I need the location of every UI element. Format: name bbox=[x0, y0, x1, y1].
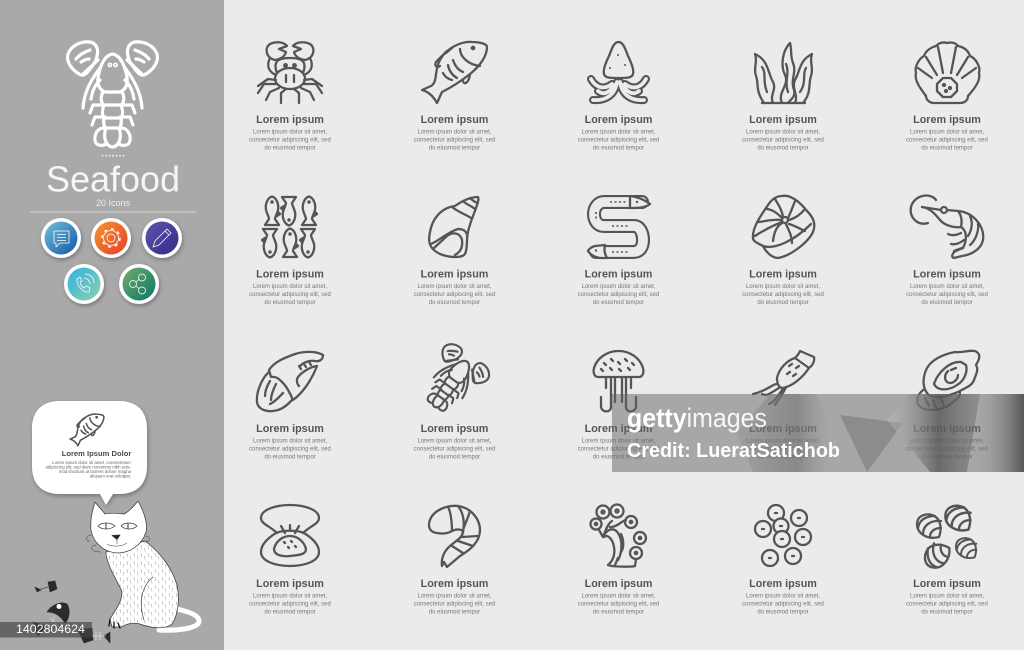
icon cell: caviar bbox=[742, 505, 824, 616]
decorative dots bbox=[102, 155, 124, 157]
icon: shrimp bbox=[429, 506, 480, 567]
body text: Lorem ipsum dolor sit amet, bbox=[417, 594, 492, 600]
icon cell: scallop bbox=[906, 42, 988, 152]
body text: consectetur adipiscing elit, sed bbox=[414, 602, 495, 608]
icon cell: oyster bbox=[906, 351, 988, 461]
icon cell: fish bbox=[414, 42, 495, 152]
body text: consectetur adipiscing elit, sed bbox=[249, 602, 331, 608]
title: Seafood bbox=[46, 158, 180, 200]
icon: pen badge bbox=[142, 218, 182, 258]
body text: do eiusmod tempor bbox=[921, 146, 973, 152]
icon: scallop bbox=[916, 42, 979, 103]
icon: jellyfish bbox=[594, 351, 643, 411]
icon: salmon steak bbox=[753, 196, 814, 258]
body text: consectetur adipiscing elit, sed bbox=[742, 602, 824, 608]
icon: whelk shell bbox=[429, 197, 478, 257]
icon cell: crab bbox=[249, 42, 331, 152]
icon: squid bbox=[591, 42, 646, 100]
body text: Lorem ipsum dolor sit amet, bbox=[417, 439, 492, 445]
icon cell: squid bbox=[578, 42, 659, 152]
heading: Lorem ipsum bbox=[585, 578, 652, 590]
heading: Lorem ipsum bbox=[421, 114, 488, 126]
heading: Lorem ipsum bbox=[421, 268, 488, 280]
icon: calamari bbox=[753, 351, 814, 405]
icon: octopus arm bbox=[590, 504, 646, 567]
body text: consectetur adipiscing elit, sed bbox=[578, 292, 659, 298]
icon: seaweed bbox=[755, 43, 812, 103]
bubble text: mod tincidunt ut laoreet dolore magna bbox=[59, 469, 132, 474]
icon cell: octopus arm bbox=[578, 504, 659, 616]
bubble text: adipiscing elit, sed diam nonummy nibh euis- bbox=[45, 464, 132, 470]
body text: consectetur adipiscing elit, sed bbox=[906, 138, 988, 144]
body text: Lorem ipsum dolor sit amet, bbox=[581, 439, 656, 445]
heading: Lorem ipsum bbox=[585, 423, 652, 435]
icon: message badge bbox=[41, 218, 81, 258]
icon: clam bbox=[261, 505, 319, 566]
heading: Lorem ipsum bbox=[421, 423, 488, 435]
heading: Lorem ipsum bbox=[256, 578, 324, 590]
cat illustration bbox=[86, 501, 199, 630]
watermark logo: gettyimages bbox=[627, 403, 767, 433]
body text: do eiusmod tempor bbox=[921, 300, 973, 306]
heading: Lorem ipsum bbox=[421, 578, 488, 590]
heading: Lorem ipsum bbox=[913, 114, 981, 126]
icon: clams bbox=[917, 506, 976, 570]
body text: Lorem ipsum dolor sit amet, bbox=[910, 284, 984, 290]
icon: fish bbox=[422, 42, 487, 103]
body text: do eiusmod tempor bbox=[429, 455, 480, 461]
subtitle: 20 Icons bbox=[96, 198, 131, 208]
body text: Lorem ipsum dolor sit amet, bbox=[253, 284, 327, 290]
body text: consectetur adipiscing elit, sed bbox=[578, 602, 659, 608]
body text: Lorem ipsum dolor sit amet, bbox=[253, 130, 327, 136]
icon: lobster bbox=[412, 340, 493, 423]
heading: Lorem ipsum bbox=[256, 268, 324, 280]
heading: Lorem ipsum bbox=[913, 423, 981, 435]
icon: caviar bbox=[755, 505, 811, 566]
body text: Lorem ipsum dolor sit amet, bbox=[746, 594, 820, 600]
icon: prawn bbox=[911, 196, 983, 258]
body text: Lorem ipsum dolor sit amet, bbox=[746, 130, 820, 136]
icon cell: jellyfish bbox=[578, 351, 659, 461]
body text: do eiusmod tempor bbox=[921, 455, 973, 461]
image id band: 1402804624 bbox=[16, 622, 85, 636]
panel: left sidebar bbox=[0, 0, 224, 650]
body text: do eiusmod tempor bbox=[429, 300, 480, 306]
body text: Lorem ipsum dolor sit amet, bbox=[253, 594, 327, 600]
heading: Lorem ipsum bbox=[913, 578, 981, 590]
body text: do eiusmod tempor bbox=[593, 455, 644, 461]
heading: Lorem ipsum bbox=[749, 268, 817, 280]
body text: Lorem ipsum dolor sit amet, bbox=[581, 284, 656, 290]
icon: bubble fish bbox=[70, 414, 104, 446]
body text: do eiusmod tempor bbox=[429, 610, 480, 616]
body text: do eiusmod tempor bbox=[264, 146, 316, 152]
body text: do eiusmod tempor bbox=[429, 146, 480, 152]
body text: do eiusmod tempor bbox=[757, 610, 809, 616]
fish bones bbox=[33, 581, 110, 643]
watermark credit: Credit: LueratSatichob bbox=[627, 439, 840, 462]
body text: Lorem ipsum dolor sit amet, bbox=[581, 594, 656, 600]
icon cell: salmon steak bbox=[742, 196, 824, 306]
body text: consectetur adipiscing elit, sed bbox=[906, 292, 988, 298]
body text: do eiusmod tempor bbox=[264, 610, 316, 616]
body text: do eiusmod tempor bbox=[593, 610, 644, 616]
body text: Lorem ipsum dolor sit amet, bbox=[910, 594, 984, 600]
icon: phone badge bbox=[64, 264, 104, 304]
body text: consectetur adipiscing elit, sed bbox=[578, 138, 659, 144]
body text: Lorem ipsum dolor sit amet, bbox=[417, 130, 492, 136]
body text: Lorem ipsum dolor sit amet, bbox=[746, 284, 820, 290]
icon cell: eel bbox=[578, 196, 659, 306]
body text: consectetur adipiscing elit, sed bbox=[414, 138, 495, 144]
body text: do eiusmod tempor bbox=[264, 455, 316, 461]
icon cell: lobster bbox=[412, 340, 495, 461]
body text: Lorem ipsum dolor sit amet, bbox=[746, 439, 820, 445]
body text: consectetur adipiscing elit, sed bbox=[906, 447, 988, 453]
body text: do eiusmod tempor bbox=[921, 610, 973, 616]
body text: consectetur adipiscing elit, sed bbox=[414, 447, 495, 453]
heading: Lorem ipsum bbox=[913, 268, 981, 280]
body text: consectetur adipiscing elit, sed bbox=[742, 292, 824, 298]
heading: Lorem ipsum bbox=[585, 268, 652, 280]
icon cell: shrimp bbox=[414, 506, 495, 616]
heading: Lorem ipsum bbox=[749, 578, 817, 590]
icon cell: clams bbox=[906, 506, 988, 616]
body text: Lorem ipsum dolor sit amet, bbox=[581, 130, 656, 136]
body text: do eiusmod tempor bbox=[593, 146, 644, 152]
body text: do eiusmod tempor bbox=[757, 146, 809, 152]
heading: Lorem ipsum bbox=[256, 114, 324, 126]
icon cell: calamari bbox=[742, 351, 824, 461]
image id band bbox=[0, 622, 92, 638]
body text: consectetur adipiscing elit, sed bbox=[578, 447, 659, 453]
body text: consectetur adipiscing elit, sed bbox=[249, 138, 331, 144]
body text: consectetur adipiscing elit, sed bbox=[414, 292, 495, 298]
icon cell: clam with pearl bbox=[249, 505, 331, 616]
body text: Lorem ipsum dolor sit amet, bbox=[253, 439, 327, 445]
body text: Lorem ipsum dolor sit amet, bbox=[910, 130, 984, 136]
icon: gear badge bbox=[91, 218, 131, 258]
body text: consectetur adipiscing elit, sed bbox=[249, 292, 331, 298]
icon: eel bbox=[588, 196, 650, 258]
body text: do eiusmod tempor bbox=[757, 455, 809, 461]
body text: consectetur adipiscing elit, sed bbox=[249, 447, 331, 453]
icon: crab bbox=[258, 42, 322, 103]
icon cell: crab claw bbox=[249, 352, 331, 461]
icon: oyster bbox=[917, 351, 979, 410]
body text: do eiusmod tempor bbox=[593, 300, 644, 306]
icon cell: small fish bbox=[249, 196, 331, 306]
body text: consectetur adipiscing elit, sed bbox=[742, 138, 824, 144]
bubble heading: Lorem Ipsum Dolor bbox=[62, 449, 131, 458]
heading: Lorem ipsum bbox=[749, 423, 817, 435]
icon: white lobster bbox=[68, 42, 157, 147]
icon cell: prawn bbox=[906, 196, 988, 306]
bubble text: Lorem ipsum dolor sit amet, consectetuer bbox=[52, 460, 132, 465]
icon: small fish bbox=[262, 196, 317, 258]
body text: consectetur adipiscing elit, sed bbox=[906, 602, 988, 608]
body text: Lorem ipsum dolor sit amet, bbox=[910, 439, 984, 445]
body text: do eiusmod tempor bbox=[757, 300, 809, 306]
icon: share badge bbox=[119, 264, 159, 304]
icon cell: whelk bbox=[414, 197, 495, 306]
heading: Lorem ipsum bbox=[585, 114, 652, 126]
body text: do eiusmod tempor bbox=[264, 300, 316, 306]
callout: speech bubble bbox=[32, 401, 147, 505]
body text: consectetur adipiscing elit, sed bbox=[742, 447, 824, 453]
icon: crab claw bbox=[257, 352, 323, 411]
heading: Lorem ipsum bbox=[256, 423, 324, 435]
body text: Lorem ipsum dolor sit amet, bbox=[417, 284, 492, 290]
bubble text: aliquam erat volutpat. bbox=[90, 474, 131, 478]
icon cell: seaweed bbox=[742, 43, 824, 152]
heading: Lorem ipsum bbox=[749, 114, 817, 126]
watermark band bbox=[612, 394, 1024, 472]
